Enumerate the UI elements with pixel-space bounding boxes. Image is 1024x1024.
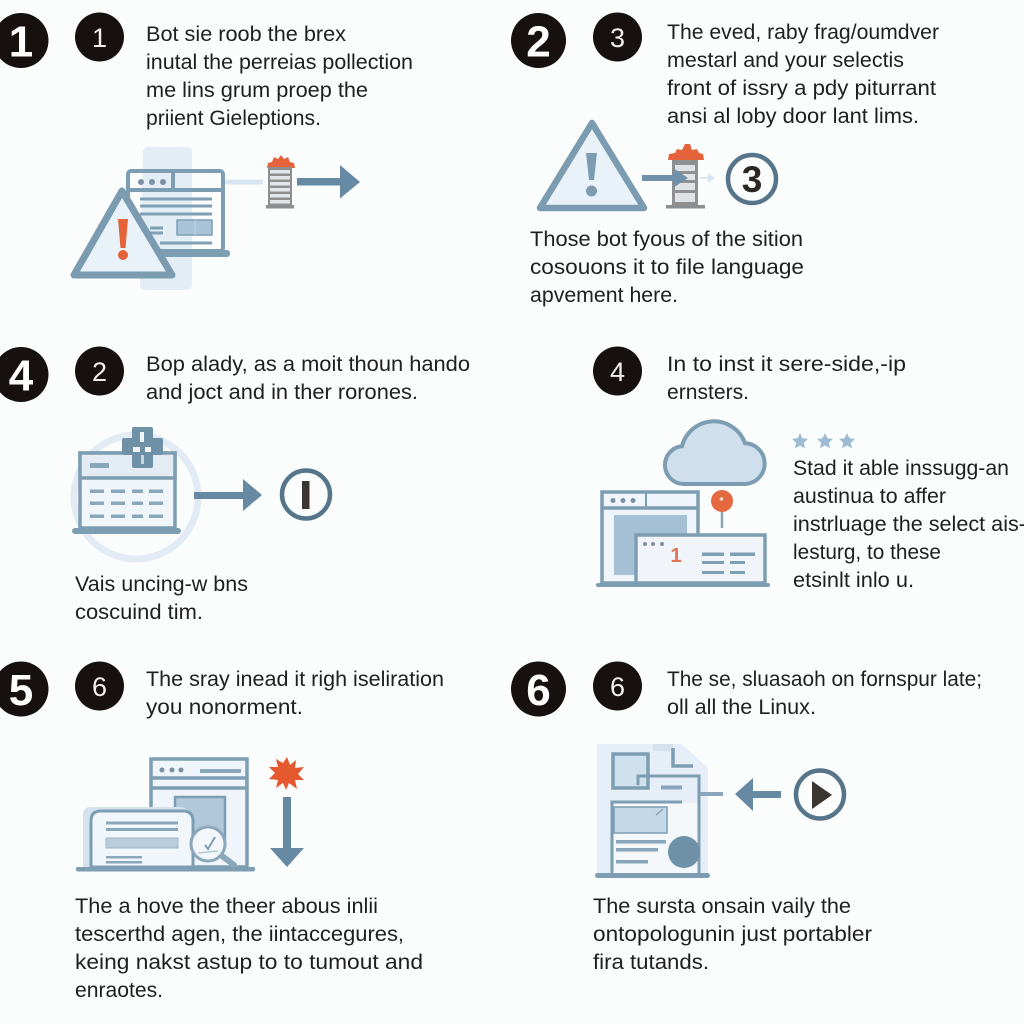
big number badge 4 (0, 347, 48, 402)
text block: step 4 note: austinua to affer (793, 484, 946, 508)
small number badge 4 (593, 346, 642, 396)
panel: step 3 (0, 346, 470, 624)
icon: document pages (595, 744, 723, 878)
panel: step 6 (511, 662, 982, 974)
text block: step 3 intro (146, 352, 470, 404)
text block: step 5 note: The a hove the theer abous inlii (75, 894, 378, 918)
small number badge 1: 1 (92, 23, 107, 53)
badge: circled bar (282, 470, 330, 518)
text block: step 3 intro: and joct and in ther rorones. (146, 380, 418, 404)
text block: step 6 intro: oll all the Linux. (667, 695, 816, 719)
text block: step 6 note (593, 894, 872, 974)
text block: step 4 intro: In to inst it sere-side,-ip (667, 352, 906, 376)
text block: step 1 intro: inutal the perreias pollection (146, 50, 413, 74)
arrow: right (297, 165, 360, 198)
big number badge 6: 6 (526, 666, 551, 715)
text block: step 4 note: instrluage the select ais- (793, 512, 1024, 536)
text block: step 5 intro: you nonorment. (146, 695, 303, 719)
small number badge 2 (75, 346, 124, 396)
text block: step 2 note: cosouons it to file language (530, 255, 804, 279)
text block: step 5 note: enraotes. (75, 978, 163, 1002)
arrow: right (194, 479, 262, 511)
arrow: down (270, 797, 304, 867)
text block: step 2 note: apvement here. (530, 283, 678, 307)
icon: browser window with warning triangle (74, 147, 263, 290)
text block: step 3 intro: Bop alady, as a moit thoun hando (146, 352, 470, 376)
text block: step 6 note: fira tutands. (593, 950, 709, 974)
icon: cloud and browser windows: 1 (670, 545, 682, 567)
small number badge 3 (593, 12, 642, 62)
text block: step 2 note: Those bot fyous of the sition (530, 227, 803, 251)
text block: step 4 note: etsinlt inlo u. (793, 568, 914, 592)
text block: step 6 note: ontopologunin just portabler (593, 922, 872, 946)
panel: step 2 (511, 12, 939, 307)
small number badge 6: 6 (92, 672, 107, 702)
text block: step 5 note (75, 894, 423, 1002)
icon: server tower with flame (266, 155, 295, 208)
text block: step 4 note: lesturg, to these (793, 540, 941, 564)
big number badge 1: 1 (9, 18, 33, 66)
big number badge 2 (511, 13, 566, 68)
small number badge 2: 2 (92, 357, 107, 387)
icon: three stars (792, 433, 855, 448)
text block: step 5 intro (146, 667, 444, 719)
small number badge 1 (75, 12, 124, 62)
text block: step 1 intro (146, 22, 413, 130)
text block: step 5 intro: The sray inead it righ iseliration (146, 667, 444, 691)
text block: step 4 note (793, 456, 1024, 592)
text block: step 2 intro (667, 20, 939, 128)
icon: warning triangle (540, 123, 644, 208)
text block: step 3 note (75, 572, 248, 624)
big number badge 5 (0, 662, 48, 716)
icon: cloud and browser windows (596, 421, 770, 587)
text block: step 5 note: tescerthd agen, the iintaccegures, (75, 922, 404, 946)
badge: circled 3: 3 (742, 159, 762, 200)
text block: step 1 intro: Bot sie roob the brex (146, 22, 346, 46)
badge: play button (796, 770, 844, 818)
text block: step 4 intro (667, 352, 906, 404)
text block: step 2 intro: The eved, raby frag/oumdver (667, 20, 939, 44)
text block: step 3 note: Vais uncing-w bns (75, 572, 248, 596)
text block: step 1 intro: me lins grum proep the (146, 78, 368, 102)
icon: server tower with flame and arrow (642, 144, 715, 208)
text block: step 4 intro: ernsters. (667, 380, 749, 404)
small number badge 6: 6 (610, 672, 625, 702)
panel: step 4 (593, 346, 1024, 592)
big number badge 5: 5 (9, 666, 33, 715)
big number badge 6 (511, 662, 566, 716)
small number badge 4: 4 (610, 357, 625, 387)
big number badge 4: 4 (9, 352, 34, 400)
arrow: left (735, 778, 781, 811)
icon: table window with medical cross (72, 427, 198, 559)
badge: circled 3 (728, 155, 776, 203)
text block: step 2 intro: ansi al loby door lant lims. (667, 104, 919, 128)
text block: step 6 intro (667, 667, 982, 719)
text block: step 2 intro: mestarl and your selectis (667, 48, 904, 72)
text block: step 6 note: The sursta onsain vaily the (593, 894, 851, 918)
text block: step 5 note: keing nakst astup to to tumout and (75, 950, 423, 974)
text block: step 2 intro: front of issry a pdy piturrant (667, 76, 936, 100)
small number badge 6 (593, 662, 642, 710)
icon: windows with magnifier (76, 759, 255, 872)
text block: step 4 note: Stad it able inssugg-an (793, 456, 1009, 480)
icon: orange burst (269, 757, 304, 790)
text block: step 6 intro: The se, sluasaoh on fornspur late; (667, 667, 982, 691)
text block: step 1 intro: priient Gieleptions. (146, 106, 321, 130)
small number badge 3: 3 (610, 23, 625, 53)
big number badge 2: 2 (526, 18, 551, 66)
panel: step 1 (0, 12, 413, 290)
big number badge 1 (0, 13, 48, 68)
small number badge 6 (75, 662, 124, 710)
text block: step 3 note: coscuind tim. (75, 600, 203, 624)
text block: step 2 note (530, 227, 804, 307)
panel: step 5 (0, 662, 444, 1002)
